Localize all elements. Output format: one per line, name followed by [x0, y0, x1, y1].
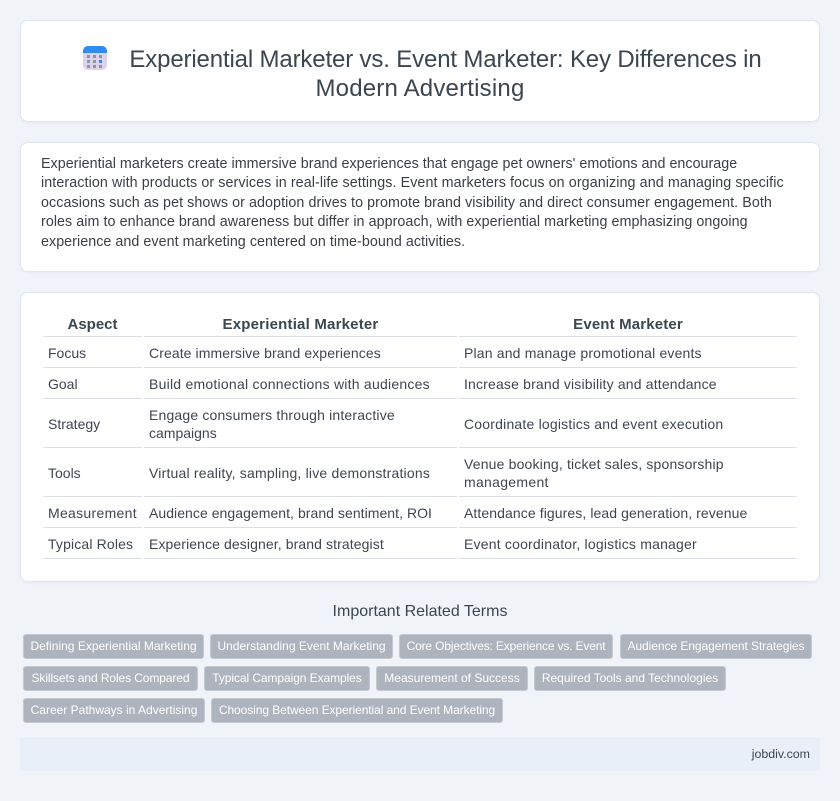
- text block: introduction: occasions such as pet shows or adoption drives to promote brand visibility and direct consumer engagement. Both: [41, 194, 772, 210]
- comparison table: Tools: [48, 465, 81, 481]
- footer credit: jobdiv.com: [752, 747, 810, 761]
- comparison table: Focus: [48, 345, 86, 361]
- comparison table: Experience designer, brand strategist: [149, 536, 384, 552]
- footer bar: [20, 737, 820, 771]
- comparison table: Plan and manage promotional events: [464, 345, 702, 361]
- panel: comparison table: [20, 292, 820, 582]
- comparison table: Build emotional connections with audiences: [149, 376, 430, 392]
- related term tags: Choosing Between Experiential and Event Marketing: [219, 703, 495, 717]
- comparison table: Goal: [48, 376, 78, 392]
- comparison table: Experiential Marketer: [223, 316, 378, 333]
- comparison table: management: [464, 474, 549, 490]
- related term tags: Measurement of Success: [384, 671, 520, 685]
- title: [129, 46, 762, 102]
- related term tags: Typical Campaign Examples: [212, 671, 362, 685]
- icon: calendar: [83, 46, 107, 70]
- related term tags: Understanding Event Marketing: [217, 639, 386, 653]
- comparison table: Measurement: [48, 505, 137, 521]
- panel: title header: [20, 20, 820, 122]
- comparison table: Event Marketer: [573, 316, 683, 333]
- comparison table: campaigns: [149, 425, 217, 441]
- comparison table: Event coordinator, logistics manager: [464, 536, 697, 552]
- related term tags: [23, 634, 812, 723]
- comparison table: Coordinate logistics and event execution: [464, 416, 723, 432]
- text block: introduction: experience and event marketing centered on time-bound activities.: [41, 234, 465, 250]
- comparison table: Virtual reality, sampling, live demonstrations: [149, 465, 430, 481]
- comparison table: Engage consumers through interactive: [149, 407, 395, 423]
- title: Modern Advertising: [315, 75, 525, 102]
- comparison table: Aspect: [67, 316, 118, 333]
- text block: introduction: [41, 156, 784, 250]
- title: Experiential Marketer vs. Event Marketer: Key Differences in: [129, 46, 762, 73]
- related term tags: Career Pathways in Advertising: [31, 703, 197, 717]
- related term tags: Skillsets and Roles Compared: [32, 671, 189, 685]
- comparison table: Venue booking, ticket sales, sponsorship: [464, 456, 724, 472]
- related term tags: Core Objectives: Experience vs. Event: [407, 639, 605, 653]
- text block: introduction: Experiential marketers create immersive brand experiences that engage pet owners' emotions and encourage: [41, 156, 737, 172]
- comparison table: Increase brand visibility and attendance: [464, 376, 717, 392]
- text block: introduction: interaction with products or services in real-life settings. Event marketers focus on organizing and managing specific: [41, 175, 784, 191]
- text block: introduction: roles aim to enhance brand awareness but differ in approach, with experiential marketing emphasizing ongoing: [41, 214, 748, 230]
- panel: introduction: [20, 142, 820, 272]
- comparison table: Audience engagement, brand sentiment, ROI: [149, 505, 432, 521]
- comparison table: Strategy: [48, 416, 100, 432]
- comparison table: [43, 316, 797, 559]
- comparison table: Typical Roles: [48, 536, 133, 552]
- comparison table: Create immersive brand experiences: [149, 345, 381, 361]
- related term tags: Required Tools and Technologies: [542, 671, 718, 685]
- related term tags: Audience Engagement Strategies: [628, 639, 804, 653]
- heading: important related terms: Important Related Terms: [333, 603, 507, 620]
- comparison table: Attendance figures, lead generation, revenue: [464, 505, 747, 521]
- related term tags: Defining Experiential Marketing: [30, 639, 197, 653]
